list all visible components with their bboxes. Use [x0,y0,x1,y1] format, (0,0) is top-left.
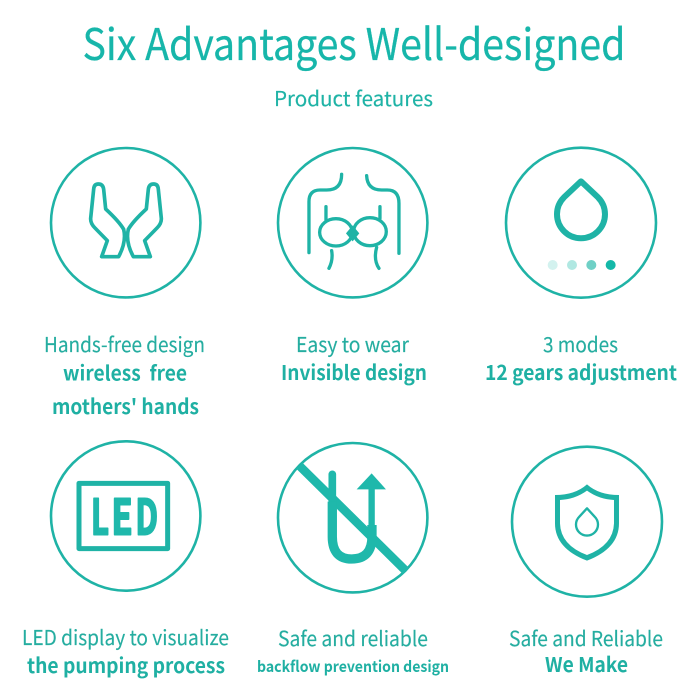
panel: backflow prevention [257,443,449,677]
panel: safe and reliable [509,447,663,678]
icon ring: hands [51,148,200,297]
label: safe and reliable [509,622,663,678]
label: 3 modes: 12 gears adjustment [485,356,677,386]
label: backflow: backflow prevention design [257,655,449,677]
icon: LED screen: D [135,479,158,549]
icon ring: drop [506,148,656,298]
icon: shield with drop [555,484,619,561]
label: hands-free: wireless free [63,356,187,386]
label: backflow: Safe and reliable [278,622,428,652]
icon ring: shield [512,447,662,597]
icon: LED screen: L [91,479,109,549]
icon: LED screen [79,479,168,549]
panel: hands-free design [44,148,205,420]
panel: LED display [22,441,229,679]
label: safe and reliable: We Make [545,648,628,678]
icon: bust with bra [309,174,399,268]
label: easy to wear: Invisible design [281,356,427,386]
panel: 3 modes [485,148,677,386]
label: easy to wear [281,328,427,386]
label: easy to wear: Easy to wear [296,328,409,358]
icon: crossed-out U arrow [299,466,406,571]
title: Six Advantages Well-designed [82,10,626,73]
label: backflow [257,622,449,677]
icon: LED screen: E [111,479,133,549]
label: 3 modes [485,328,677,386]
icon: water drop [548,181,616,270]
label: 3 modes: 3 modes [543,328,618,358]
icon ring: LED [51,441,200,591]
label: LED display: the pumping process [27,649,225,679]
label: hands-free [44,328,205,420]
label: safe and reliable: Safe and Reliable [509,622,663,652]
panel: easy to wear [278,148,427,386]
label: LED display [22,621,229,679]
subtitle: Product features [274,82,433,112]
label: hands-free: Hands-free design [44,328,205,358]
icon ring: bust [278,148,427,297]
icon ring: backflow [278,443,427,592]
label: LED display: LED display to visualize [22,621,229,651]
icon: hands [91,184,161,257]
label: hands-free: mothers' hands [52,390,199,420]
